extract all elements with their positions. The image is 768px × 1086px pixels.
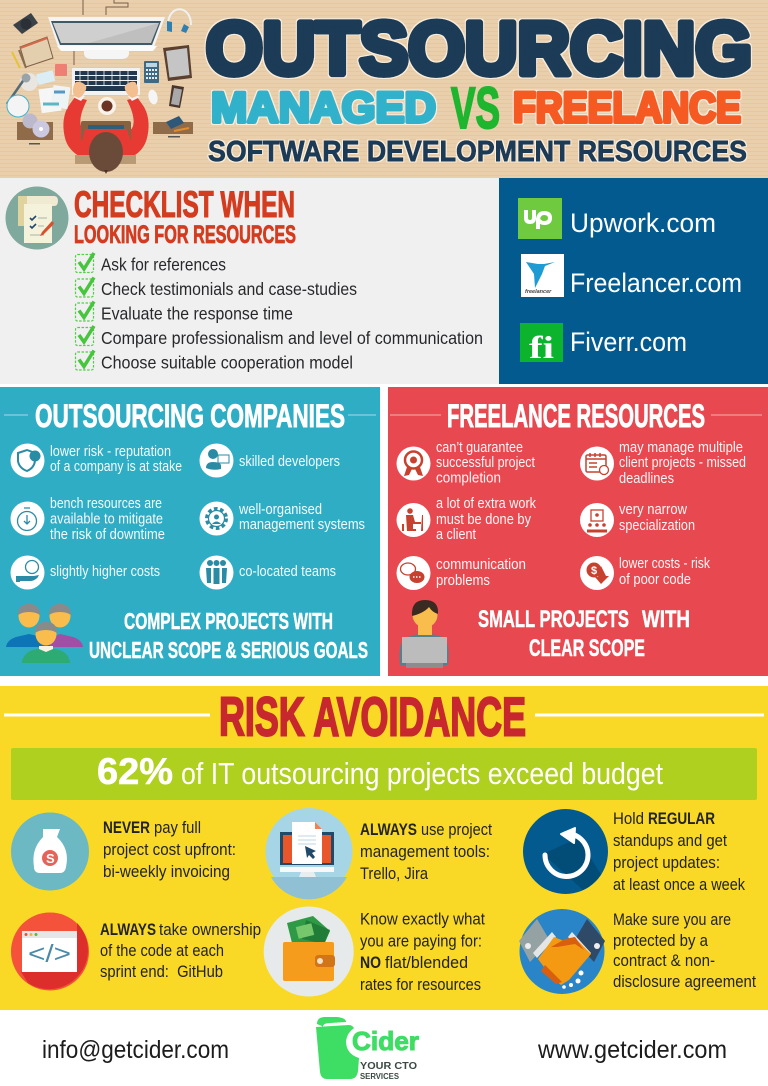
text: completion: [436, 470, 501, 486]
item: co-located teams: [200, 556, 336, 590]
coffee cup: [98, 97, 116, 115]
item 1: Ask for references: [101, 254, 226, 274]
smartphone: [169, 85, 184, 108]
website: www.getcider.com: [537, 1036, 727, 1064]
tip: code ownership: [11, 912, 261, 990]
check list items: [76, 253, 483, 372]
icon: person at desk: [396, 503, 430, 537]
icon: coin in hand: [10, 556, 44, 590]
text: can’t guarantee: [436, 440, 523, 456]
text: client projects - missed: [619, 455, 746, 471]
text: successful project: [436, 455, 535, 471]
icon: check 2: [76, 278, 94, 297]
lamp: [7, 73, 38, 117]
left drawer with discs: [17, 114, 53, 144]
text: at least once a week: [613, 875, 745, 894]
item: skilled developers: [200, 444, 340, 478]
text: Hold: [613, 809, 644, 828]
panel: freelance resources: [388, 387, 768, 676]
mouse: [147, 89, 159, 105]
panel: risk avoidance: [0, 686, 768, 1010]
text: ALWAYS: [360, 820, 417, 839]
person: [63, 82, 149, 174]
logo: cider: [316, 1017, 419, 1081]
upwork label: Upwork.com: [570, 208, 716, 238]
text: a client: [436, 527, 476, 543]
text: contract & non-: [613, 951, 715, 970]
heading: RISK AVOIDANCE: [219, 686, 526, 748]
text: of poor code: [619, 572, 691, 588]
text: communication: [436, 557, 526, 573]
panel: freelance sites: [499, 178, 768, 384]
text: available to mitigate: [50, 512, 163, 528]
logo tagline: YOUR CTO: [360, 1060, 417, 1072]
item: lower risk: [10, 444, 182, 478]
heading: OUTSOURCING COMPANIES: [35, 398, 345, 434]
icon: group of people: [6, 604, 83, 663]
text: use project: [421, 820, 492, 839]
text: slightly higher costs: [50, 564, 160, 580]
icon: fiverr logo: fi: [529, 329, 554, 365]
item: communication: [396, 556, 526, 590]
tip: never pay: [11, 812, 236, 890]
callout: small projects: CLEAR SCOPE: [529, 635, 645, 662]
item: narrow specialization: [580, 502, 695, 537]
icon: presentation: [580, 503, 614, 537]
icon: money bag: [11, 812, 89, 890]
tip: contract nda: [519, 909, 756, 994]
text: of the code at each: [100, 941, 224, 960]
callout: small projects: SMALL PROJECTS: [478, 606, 629, 633]
text: project cost upfront:: [103, 840, 236, 859]
title: managed: MANAGED: [211, 84, 436, 132]
item: lower costs: [580, 556, 711, 590]
item: no guarantee: [396, 440, 535, 486]
stat value: 62%: [97, 751, 173, 792]
icon: monitor with document: [266, 808, 352, 899]
text: of a company is at stake: [50, 459, 182, 475]
text: ALWAYS: [100, 920, 156, 939]
icon: freelancer with laptop: [400, 600, 449, 668]
icon: speech bubbles: [396, 556, 430, 590]
text: bi-weekly invoicing: [103, 862, 230, 881]
text: a lot of extra work: [436, 496, 537, 512]
tip: regular standups: [523, 809, 745, 894]
icon: shield: [10, 444, 44, 478]
freelancer label: Freelancer.com: [570, 268, 742, 298]
email: info@getcider.com: [42, 1036, 229, 1064]
item 5: Choose suitable cooperation model: [101, 352, 353, 372]
text: management systems: [239, 517, 365, 533]
icon: calendar: [580, 446, 614, 480]
keyboard: [72, 68, 140, 95]
item: higher costs: [10, 556, 160, 590]
text: rates for resources: [360, 975, 481, 994]
icon: checklist paper: [6, 186, 68, 250]
icon: check 1: [76, 253, 94, 272]
callout: small projects: WITH: [642, 606, 690, 633]
text: problems: [436, 573, 490, 589]
text: specialization: [619, 518, 695, 534]
text: well-organised: [238, 502, 322, 518]
calculator: [144, 61, 159, 83]
callout: complex projects: UNCLEAR SCOPE & SERIOUS GOALS: [89, 637, 368, 663]
title: freelance: FREELANCE: [513, 84, 741, 132]
icon: fiverr logo: [520, 323, 563, 365]
icon: check 4: [76, 326, 94, 346]
icon: code window: [11, 912, 89, 990]
icon: team: [200, 556, 234, 590]
monitor: [48, 17, 165, 59]
text: skilled developers: [239, 454, 340, 470]
icon: refresh arrow: [523, 809, 608, 894]
text: NO: [360, 953, 381, 972]
icon: stopwatch: [10, 502, 44, 536]
text: protected by a: [613, 931, 708, 950]
text: lower risk - reputation: [50, 444, 171, 460]
text: lower costs - risk: [619, 556, 711, 572]
logo tagline: SERVICES: [360, 1072, 400, 1081]
text: may manage multiple: [619, 440, 743, 456]
text: co-located teams: [239, 564, 336, 580]
text: must be done by: [436, 512, 532, 528]
text: very narrow: [619, 502, 687, 518]
fiverr label: Fiverr.com: [570, 327, 687, 357]
icon: code window: </>: [28, 940, 71, 968]
text: management tools:: [360, 842, 490, 861]
text: pay full: [154, 818, 201, 837]
text: NEVER: [103, 818, 150, 837]
headphones: [167, 9, 191, 33]
item 4: Compare professionalism and level of communication: [101, 328, 483, 348]
icon: check 3: [76, 302, 94, 321]
logo wordmark: Cider: [352, 1026, 419, 1056]
desk illustration: [7, 0, 193, 174]
item: missed deadlines: [580, 440, 746, 487]
text: you are paying for:: [360, 932, 482, 950]
item 2: Check testimonials and case-studies: [101, 279, 357, 299]
camera: [13, 13, 38, 34]
text: deadlines: [619, 471, 674, 487]
papers: [36, 64, 70, 113]
text: Know exactly what: [360, 910, 485, 928]
tip: know what you pay: [264, 906, 485, 996]
icon: upwork logo: [518, 198, 562, 239]
icon: handshake: [519, 909, 605, 994]
heading: looking for resources: LOOKING FOR RESOURCES: [74, 221, 296, 249]
stat text: of IT outsourcing projects exceed budget: [181, 756, 663, 791]
icon: wallet: [264, 906, 354, 996]
item: bench resources: [10, 496, 165, 543]
icon: developer: [200, 444, 234, 478]
text: Make sure you are: [613, 910, 731, 929]
notebook: [20, 37, 53, 67]
text: standups and get: [613, 831, 727, 850]
item: extra work: [396, 496, 537, 543]
icon: check 5: [76, 350, 94, 370]
panel: checklist: [0, 178, 499, 384]
text: REGULAR: [648, 809, 715, 828]
icon: freelancer logo: freelancer: [525, 289, 552, 295]
text: take ownership: [159, 920, 261, 939]
item 3: Evaluate the response time: [101, 304, 293, 324]
title: vs: VS: [451, 76, 500, 141]
icon: falling dollar: $: [591, 565, 597, 577]
panel: outsourcing companies: [0, 387, 380, 676]
text: project updates:: [613, 853, 720, 872]
title: outsourcing: OUTSOURCING: [206, 7, 752, 90]
icon: award: [396, 446, 430, 480]
text: sprint end: GitHub: [100, 962, 223, 981]
text: bench resources are: [50, 496, 162, 512]
icon: freelancer logo: [521, 254, 564, 297]
text: Trello, Jira: [360, 864, 428, 883]
icon: money bag: S: [46, 851, 55, 866]
footer: [42, 1017, 727, 1081]
callout: complex projects: COMPLEX PROJECTS WITH: [124, 608, 333, 634]
text: flat/blended: [385, 953, 468, 972]
header banner: [0, 0, 768, 178]
item: management systems: [200, 502, 365, 536]
text: the risk of downtime: [50, 527, 165, 543]
tablet: [163, 45, 192, 81]
heading: checklist when: CHECKLIST WHEN: [74, 184, 295, 225]
icon: gear: [200, 502, 234, 536]
stat banner: [11, 748, 757, 800]
right drawer with card: [153, 116, 193, 138]
tip: pm tools: [266, 808, 492, 899]
